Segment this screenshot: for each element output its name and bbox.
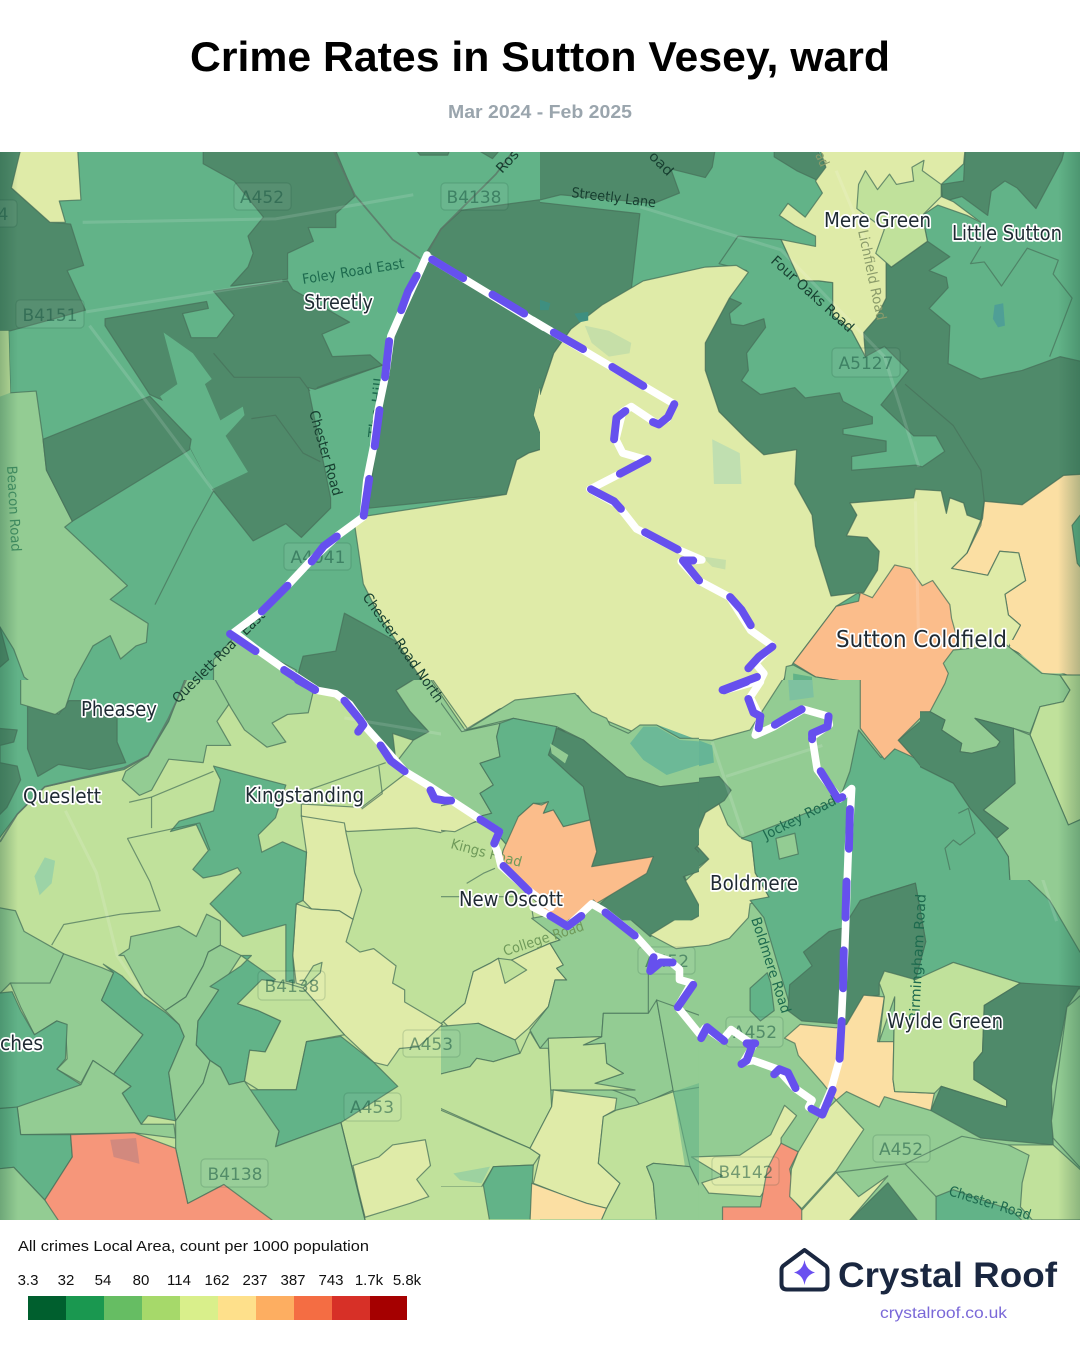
- road shields: B4138: [265, 977, 319, 997]
- road name labels: Chester Road: [947, 1184, 1033, 1224]
- road shields: A4041: [291, 548, 345, 568]
- road name labels: Queslett Road East: [170, 608, 269, 707]
- legend scale values: 3.3: [18, 1272, 38, 1289]
- place name labels: Little Sutton: [952, 221, 1062, 245]
- place name labels: [0, 208, 1062, 1055]
- road shields: B4138: [208, 1165, 262, 1185]
- legend scale values: 114: [167, 1272, 191, 1289]
- road shields: [0, 183, 930, 1187]
- map detail: east of Sutton Coldfield: [917, 637, 1080, 883]
- website url: crystalroof.co.uk: [880, 1305, 1008, 1322]
- road name labels: Lichfield Road: [854, 229, 889, 322]
- place name labels: Sutton Coldfield: [836, 627, 1007, 653]
- logo: Crystal Roof: [782, 1250, 1057, 1322]
- road shields: A5127: [839, 354, 893, 374]
- road name labels: Jockey Road: [760, 793, 839, 844]
- legend scale values: 743: [318, 1272, 344, 1289]
- map detail: New Oscott and Boldmere park edge: [437, 693, 703, 927]
- place name labels: Kingstanding: [245, 783, 364, 807]
- road name labels: [3, 147, 1033, 1224]
- wordmark: Crystal Roof: [838, 1256, 1057, 1295]
- legend scale values: 387: [280, 1272, 306, 1289]
- road shields: A452: [879, 1140, 923, 1160]
- road shields: B4151: [23, 306, 77, 326]
- place name labels: Boldmere: [710, 871, 798, 895]
- place name labels: Wylde Green: [887, 1009, 1003, 1033]
- map detail: College Road and A453 neighbourhoods: [437, 897, 703, 1223]
- road name labels: Chester Road North: [359, 590, 446, 706]
- legend scale values: 162: [204, 1272, 230, 1289]
- ward boundary: white base line: [234, 255, 852, 1114]
- road name labels: Streetly Lane: [571, 185, 657, 211]
- map vignette: soft edge shading: [0, 152, 1080, 1220]
- road name labels: Boldmere Road: [747, 915, 793, 1015]
- road shields: A452: [733, 1023, 777, 1043]
- road shields: A453: [409, 1035, 453, 1055]
- road name labels: Ros: [493, 147, 523, 177]
- road name labels: Birmingham Road: [907, 894, 930, 1022]
- place name labels: Streetly: [304, 290, 373, 314]
- legend scale values: [18, 1272, 422, 1289]
- road name labels: ad: [811, 150, 832, 169]
- legend scale values: 80: [133, 1272, 149, 1289]
- road name labels: oad: [645, 149, 676, 180]
- subtitle: date range: Mar 2024 - Feb 2025: [448, 102, 632, 122]
- legend scale values: 54: [95, 1272, 111, 1289]
- place name labels: Queslett: [23, 784, 101, 808]
- icon: house with star: [782, 1250, 828, 1290]
- road shields: A452: [645, 952, 689, 972]
- road shields: B4142: [719, 1163, 773, 1183]
- place name labels: Pheasey: [81, 697, 157, 721]
- legend colour bar: [28, 1296, 407, 1320]
- ward boundary: purple dashes: [230, 260, 850, 1115]
- legend: [18, 1238, 422, 1320]
- title: Crime Rates in Sutton Vesey, ward: [190, 33, 890, 80]
- road shields: A452: [240, 188, 284, 208]
- map area: north-east neighbourhoods: [533, 147, 1080, 701]
- legend title: All crimes Local Area, count per 1000 population: [18, 1238, 369, 1255]
- place name labels: ches: [0, 1031, 43, 1055]
- map area: south-west neighbourhoods: [0, 677, 551, 1231]
- road name labels: Four Oaks Road: [767, 253, 857, 336]
- place name labels: Mere Green: [824, 208, 931, 232]
- road name labels: Kings Road: [449, 836, 524, 871]
- road shields: A453: [350, 1098, 394, 1118]
- road shields: B4138: [447, 188, 501, 208]
- road name labels: Beacon Road: [3, 465, 23, 552]
- place name labels: New Oscott: [459, 887, 563, 911]
- legend scale values: 237: [242, 1272, 268, 1289]
- map area: north-west neighbourhoods: [0, 147, 551, 701]
- legend scale values: 32: [58, 1272, 74, 1289]
- road name labels: The Hill: [366, 377, 388, 440]
- map area: south-east neighbourhoods: [537, 677, 1080, 1231]
- road name labels: Chester Road: [305, 409, 345, 498]
- legend scale values: 5.8k: [393, 1272, 422, 1289]
- road name labels: Foley Road East: [301, 256, 406, 288]
- road name labels: College Road: [501, 919, 586, 960]
- legend scale values: 1.7k: [355, 1272, 384, 1289]
